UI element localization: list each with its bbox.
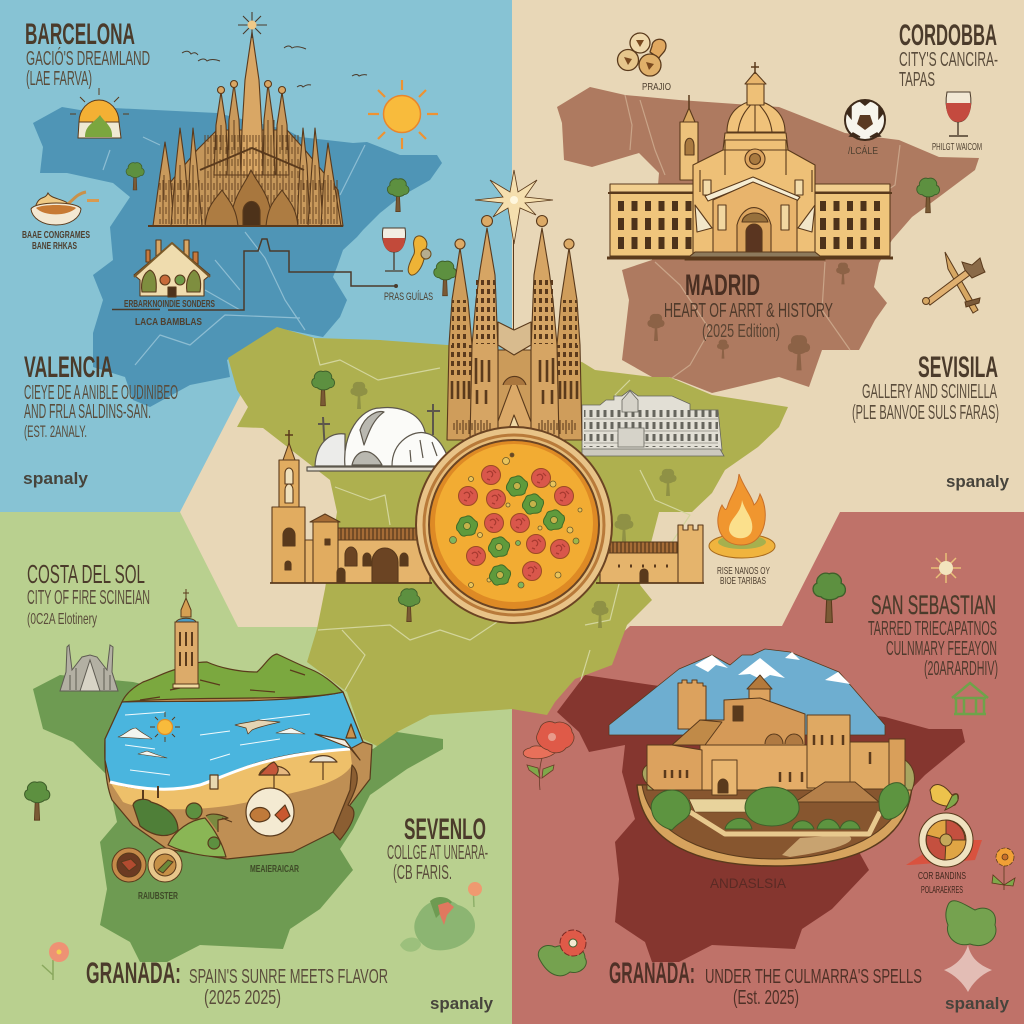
heading block: Barcelona: [25, 18, 150, 90]
icon: small sun: [931, 553, 961, 583]
label: Andalusia: ANDASLSIA: [710, 875, 787, 891]
icon: lighthouse: [173, 589, 199, 688]
text block: Madrid: (2025 Edition): [702, 321, 780, 341]
label: wine: PRAS GUÍLAS: [384, 290, 433, 303]
panel: rose Granada quadrant: [512, 512, 1024, 1024]
icon: tree on blue map east: [387, 179, 409, 212]
brand: spanaly rose: spanaly: [945, 994, 1010, 1013]
icon: star: [475, 170, 553, 330]
text block: Costa del Sol: CITY OF FIRE SCINEIAN: [27, 587, 150, 609]
landmark: Madrid palace: [607, 62, 893, 260]
text block: Valencia: CIEYE DE A ANIBLE OUDINIBEO: [24, 382, 178, 404]
text block: Valencia: [24, 351, 178, 441]
icon: yellow flower and plate: [906, 785, 982, 867]
landmark: grey palace: [582, 390, 724, 456]
map: brown Spain: [557, 87, 979, 393]
landmark: left Moorish castle: [270, 430, 432, 583]
illustration: Alhambra: [609, 649, 914, 866]
text block: Cordobba: TAPAS: [899, 69, 935, 91]
label: bowl: BANE RHKAS: [32, 240, 77, 252]
heading block: Barcelona: BARCELONA: [25, 18, 135, 51]
label: Prado: PRAJIO: [642, 81, 671, 93]
label: plate: COR BANDINS: [918, 870, 966, 882]
label: inset: MEAIERAICAR: [250, 863, 299, 875]
map: maroon Spain: [557, 675, 965, 962]
label: flame: BIOE TARIBAS: [720, 575, 766, 587]
text block: Granada rose: GRANADA:: [609, 957, 695, 990]
icon: Gaudi house: [134, 240, 210, 297]
icon: bowl of food: [31, 192, 99, 225]
icons: faded trees on brown map: [647, 263, 850, 370]
icon: dishes: [112, 848, 182, 882]
label: ball: /LCÁLE: [848, 144, 878, 157]
label: plate: POLARAEKRES: [921, 884, 963, 896]
text block: Granada rose: [609, 957, 922, 1009]
brand: spanaly blue: spanaly: [23, 469, 89, 488]
map: blue Spain: [33, 107, 442, 407]
connector line: [112, 239, 396, 310]
heading block: Barcelona: GACIÓ'S DREAMLAND: [26, 47, 150, 70]
icon: tree south of pizza: [398, 589, 420, 622]
text block: Valencia: (EST. 2ANALY.: [24, 422, 87, 441]
icon: green bush: [946, 901, 996, 946]
text block: Valencia: AND FRLA SALDINS-SAN.: [24, 401, 151, 423]
map: green Spain: [33, 675, 443, 962]
brand: spanaly beige: spanaly: [946, 472, 1010, 491]
icon: green house: [952, 683, 988, 714]
text block: Granada green: (2025 2025): [204, 987, 281, 1009]
map: olive Spain: [228, 327, 788, 749]
icon: flower and leaves bottom: [538, 930, 586, 976]
landmark: right fortress: [596, 525, 704, 583]
icon: sun: [368, 80, 438, 149]
icon: flower left: [42, 942, 69, 980]
text block: Sevisila: [852, 351, 999, 424]
pizza: [416, 427, 612, 623]
icon: red flower: [523, 722, 574, 790]
text block: Costa del Sol: [27, 559, 150, 628]
text block: Madrid: [664, 269, 833, 341]
label: La Rambla: LACA BAMBLAS: [135, 316, 202, 328]
landmark: white opera building: [307, 404, 450, 471]
icon: tree rose: [813, 573, 845, 622]
icon: three plates: [618, 33, 666, 76]
icon: flame on plate: [709, 474, 775, 558]
text block: Costa del Sol: COSTA DEL SOL: [27, 559, 145, 589]
icon: birds: [182, 46, 367, 87]
panel: blue Barcelona quadrant: [0, 0, 512, 512]
icon: orange flower: [992, 848, 1015, 890]
icon: tree on brown map: [917, 178, 940, 213]
text block: Madrid: HEART OF ARRT & HISTORY: [664, 300, 833, 322]
text block: San Sebastian: [868, 590, 998, 680]
landmark: Sagrada Familia large: [148, 12, 343, 226]
icon: top star: [238, 12, 267, 38]
text block: Valencia: VALENCIA: [24, 351, 113, 384]
label: dishes: RAIUBSTER: [138, 890, 178, 902]
icon: pale four-point star: [944, 945, 992, 992]
label: flame: RISE NANOS OY: [717, 565, 770, 577]
icon: wine glass right: [946, 92, 971, 136]
icon: trees on olive map: [312, 371, 677, 628]
panel: green Costa del Sol quadrant: [0, 512, 512, 1024]
text block: Granada green: SPAIN'S SUNRE MEETS FLAVOR: [189, 966, 388, 988]
label: house: ERBARKNOINDIE SONDERS: [124, 298, 215, 310]
illustration: coast inset: [105, 654, 372, 859]
icon: crossed swords: [922, 252, 985, 313]
text: COLLGE AT UNEARA-: [387, 842, 488, 864]
text block: Granada rose: (Est. 2025): [733, 987, 799, 1009]
icon: tree left: [25, 782, 50, 820]
text block: Costa del Sol: (0C2A Elotinery: [27, 611, 97, 628]
icon: sun and hill: [70, 88, 129, 138]
text block: Granada green: [86, 957, 388, 1009]
text block: Sevenlo: SEVENLO: [404, 813, 486, 846]
label: flame: [717, 565, 770, 587]
label: wine right: PHILGT WAICOM: [932, 141, 982, 153]
icon: soccer ball: [845, 100, 885, 140]
icon: wine glass and pretzel: [382, 228, 431, 288]
icon: tree on blue map: [126, 163, 144, 190]
text block: Sevenlo: (CB FARIS.: [393, 862, 452, 884]
landmark: central Sagrada Familia: [447, 170, 582, 440]
label: bowl: [22, 229, 90, 252]
text block: Madrid: MADRID: [685, 269, 760, 302]
text block: Cordobba: [899, 19, 998, 91]
text block: Granada green: GRANADA:: [86, 957, 181, 990]
text block: Sevenlo: [387, 813, 488, 884]
label: bowl: BAAE CONGRAMES: [22, 229, 90, 241]
label: plate: [918, 870, 966, 896]
icon: faded flower and bushes: [400, 882, 482, 952]
brand: spanaly green: spanaly: [430, 994, 494, 1013]
icon: grey cathedral: [60, 645, 118, 691]
heading block: Barcelona: (LAE FARVA): [26, 68, 92, 90]
icon: tree near wine: [434, 261, 457, 296]
